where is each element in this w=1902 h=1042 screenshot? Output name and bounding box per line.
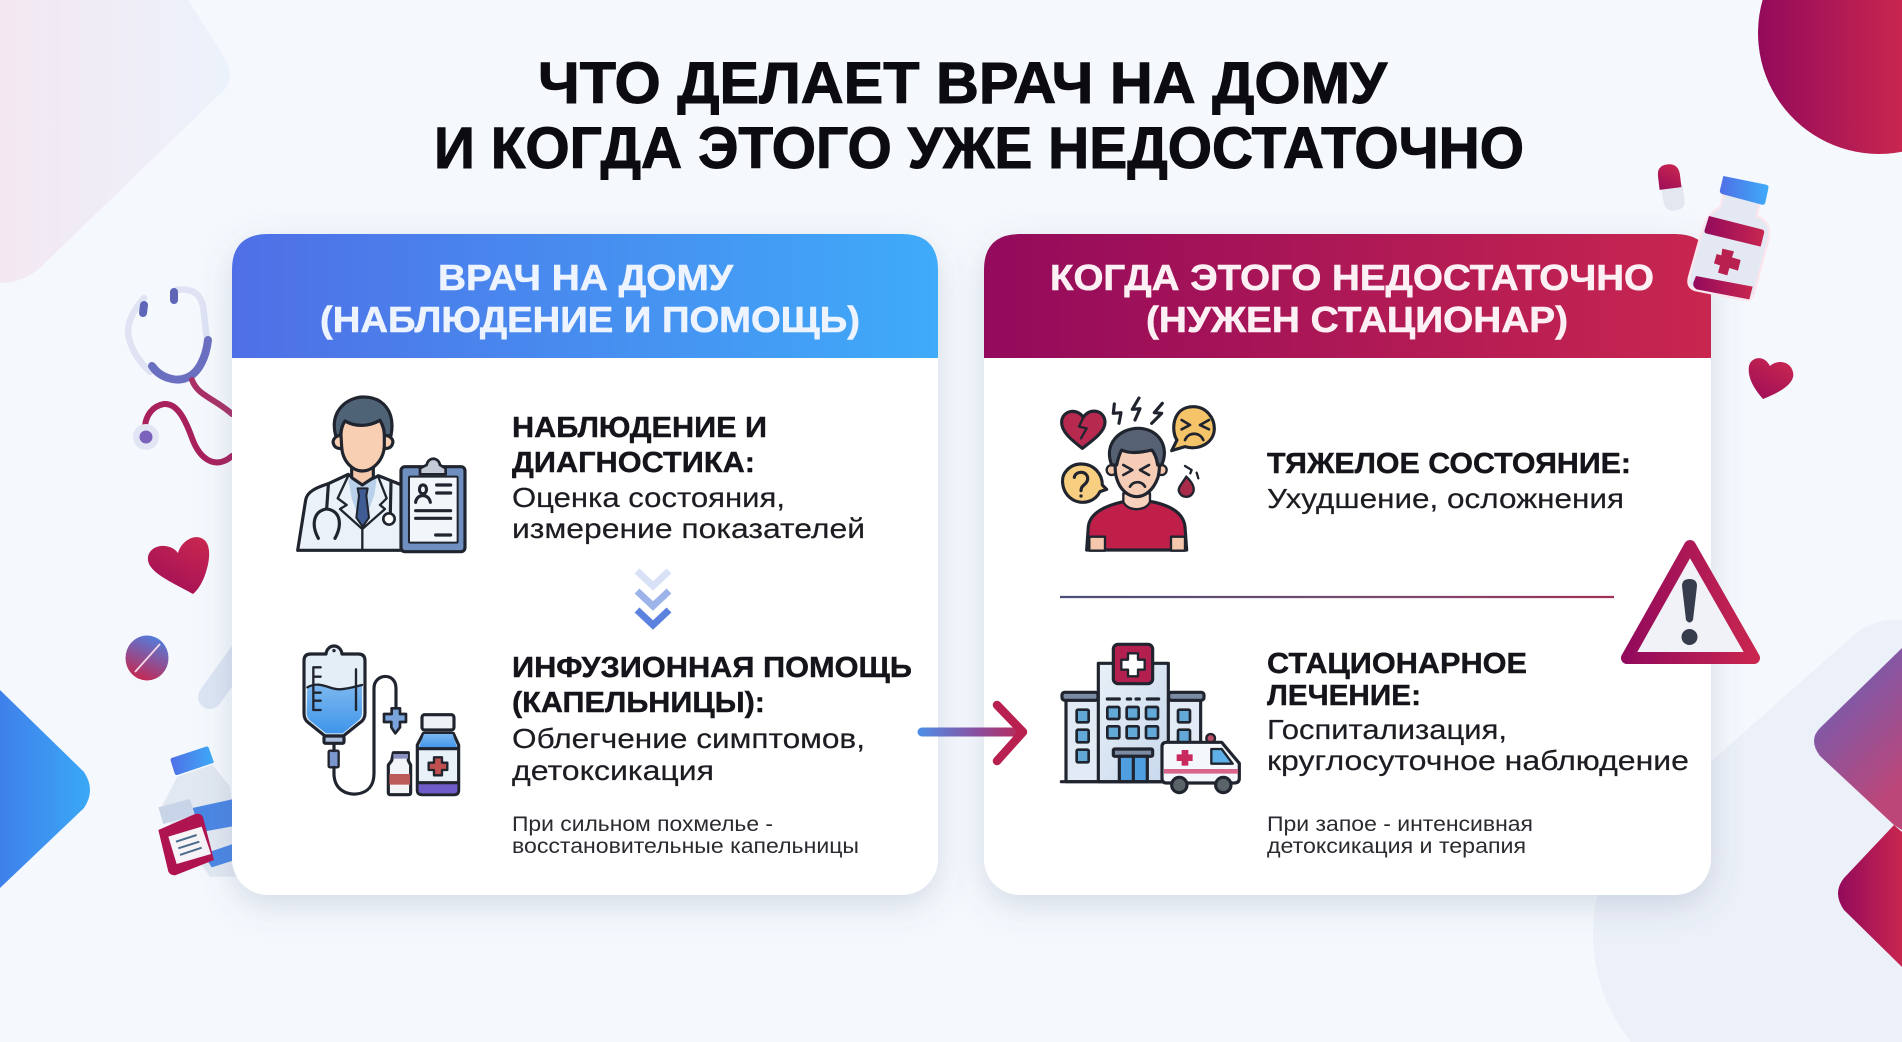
pill score line [135,644,160,672]
ears [333,436,343,449]
card body [984,234,1711,895]
windows [1077,707,1190,762]
heading line 1: НАБЛЮДЕНИЕ И [512,412,767,444]
bag [304,646,365,736]
body line 1: Оценка состояния, [512,482,785,513]
icon: person in severe condition [1062,398,1214,551]
red cross sign [1113,644,1153,684]
angry emoji bubble [1172,407,1214,451]
label lines [176,835,202,855]
bottle purple base [419,783,457,793]
drip clamp [384,708,406,733]
lightning bolts [1113,398,1162,423]
body line 1: Госпитализация, [1267,714,1507,745]
bottle cross [1714,249,1741,275]
divider line [1060,596,1614,598]
white cross [1121,653,1145,676]
neck [352,467,373,485]
arrow: triple chevron down [637,571,669,625]
arms skin [1089,537,1185,551]
clipboard board [401,467,465,552]
note line 1: При запое - интенсивная [1267,813,1533,836]
heading line 2: (НУЖЕН СТАЦИОНАР) [1146,299,1568,340]
exclamation bar [1682,579,1697,622]
body line 2: детоксикация [512,755,714,786]
decorative stethoscope [128,290,232,462]
blue stripes [183,798,240,832]
arrow shaft [922,728,1022,736]
capsule bottom [1661,185,1686,212]
red bottle label [168,827,211,864]
small vial [388,753,411,795]
shirt [1087,502,1187,550]
bag port [324,736,344,743]
background shape: red diamond right [1838,825,1902,967]
body line 2: круглосуточное наблюдение [1267,745,1689,776]
card body [232,234,938,895]
icon: IV drip and vials [304,646,459,795]
icon: hospital and ambulance [1061,644,1239,793]
ambulance beacon [1206,734,1215,743]
side wings [1066,700,1201,782]
text block: severe condition [1267,448,1631,514]
triangle [1627,546,1754,658]
arrow: from home care to hospital [922,705,1023,761]
title line 2: И КОГДА ЭТОГО УЖЕ НЕДОСТАТОЧНО [434,116,1524,181]
red small bottle neck [158,799,195,824]
background shape: pale hexagon bottom right [1690,620,1902,1042]
door canopy [1113,749,1153,756]
bottom stripe [1693,276,1753,299]
small vial cap [393,754,408,759]
ambulance cross [1177,750,1193,766]
liquid surface and scale [307,667,362,710]
stethoscope: purple bow [152,340,208,380]
capsule [1657,163,1686,212]
note: strong hangover [512,813,859,858]
main tower [1098,663,1168,782]
ground line [1061,777,1165,786]
door [1119,756,1147,782]
ambulance stripe [1164,769,1238,774]
bottle cross [429,757,447,775]
icon: medicine bottles left [158,747,240,877]
arrow head [997,705,1023,761]
bottle cap [422,715,454,730]
body line 2: измерение показателей [512,513,865,544]
heading line 1: ИНФУЗИОННАЯ ПОМОЩЬ [512,652,912,684]
ears [1107,465,1117,475]
title [434,51,1524,181]
card header band [232,234,938,358]
roof right [1169,692,1204,700]
icon: pale capsule behind card [210,655,240,697]
wheels [1172,777,1187,793]
coat [298,474,402,550]
capsule top [1657,163,1681,190]
title line 1: ЧТО ДЕЛАЕТ ВРАЧ НА ДОМУ [538,51,1388,116]
panel: when it is not enough [984,234,1711,895]
smoke marks [1185,466,1198,478]
shirt [348,478,377,527]
pale bottle body [160,765,240,877]
background shape: red circle top right [1758,0,1902,154]
liquid [307,685,362,733]
background shape: blue diamond left [0,690,90,888]
note line 1: При сильном похмелье - [512,813,773,836]
icon: heart right [1749,358,1793,399]
hair [334,397,392,436]
clipboard paper [409,477,458,543]
stethoscope disc [383,513,395,525]
angry face [1182,420,1209,440]
icon: doctor with clipboard [298,397,465,552]
background shape: purple diamond right [1814,648,1902,830]
heading line 1: КОГДА ЭТОГО НЕДОСТАТОЧНО [1050,257,1654,298]
roof left [1062,692,1098,700]
lapels [338,476,387,550]
clipboard clip [420,459,446,474]
bottle blue top [419,734,457,748]
background shape: pale circle bottom right [1593,762,1902,1042]
icon: pill disc [126,636,168,680]
stethoscope: red tube [145,404,232,462]
hair [1109,428,1164,465]
question bubble [1063,464,1107,502]
coat stethoscope [314,482,391,538]
label stripe [1704,216,1764,247]
icon: medicine bottle right [1657,163,1769,300]
tube connector [329,751,339,767]
chevron 3 [637,610,669,625]
icon: warning triangle [1627,546,1754,658]
note line 2: детоксикация и терапия [1267,835,1526,858]
bag hook hole [332,649,336,652]
panel: doctor at home [232,234,938,895]
stethoscope: ear tips [143,292,174,313]
broken heart [1062,411,1105,448]
chevron 2 [637,591,669,606]
neck [1123,493,1150,509]
face [341,420,384,471]
text block: inpatient treatment [1267,648,1689,776]
ambulance body [1162,742,1239,783]
patient icon and lines on paper [416,485,451,535]
heart crack [1079,417,1087,438]
note line 2: восстановительные капельницы [512,835,859,858]
body: Ухудшение, осложнения [1267,483,1624,514]
heading line 2: ЛЕЧЕНИЕ: [1267,680,1421,712]
card header band [984,234,1711,358]
tie [356,488,369,527]
text block: infusion help [512,652,912,786]
bottle body [1688,193,1769,300]
heading line 2: (НАБЛЮДЕНИЕ И ПОМОЩЬ) [320,299,860,340]
bottle outlines [418,749,458,783]
ambulance window [1211,749,1233,764]
blue cap [171,747,214,775]
body line 1: Облегчение симптомов, [512,723,865,754]
red small bottle body [158,814,214,875]
stethoscope: chest piece [133,424,159,450]
stethoscope: tube to card [192,380,232,414]
tube [334,676,396,794]
note: binge [1267,813,1533,858]
heading line 2: (КАПЕЛЬНИЦЫ): [512,687,765,719]
card heading [320,257,860,340]
heading line 1: СТАЦИОНАРНОЕ [1267,648,1527,680]
small vial band [389,774,410,785]
blood drop [1179,477,1194,497]
heading line 1: ВРАЧ НА ДОМУ [438,257,734,298]
heading: ТЯЖЕЛОЕ СОСТОЯНИЕ: [1267,448,1631,480]
facade dashes [1107,694,1159,704]
icon: heart left [148,537,209,594]
background shape: pale hexagon top left [0,0,230,283]
chevron 1 [637,571,669,586]
face features [1123,465,1149,487]
heading line 2: ДИАГНОСТИКА: [512,447,755,479]
face [1115,450,1159,497]
exclamation dot [1682,629,1698,645]
text block: observation and diagnostics [512,412,865,544]
stethoscope: light ear tubes [128,290,207,372]
pill body [126,636,168,680]
big bottle [417,733,459,795]
question mark [1074,472,1088,491]
bottle cap [1720,176,1769,205]
card heading [1050,257,1654,340]
